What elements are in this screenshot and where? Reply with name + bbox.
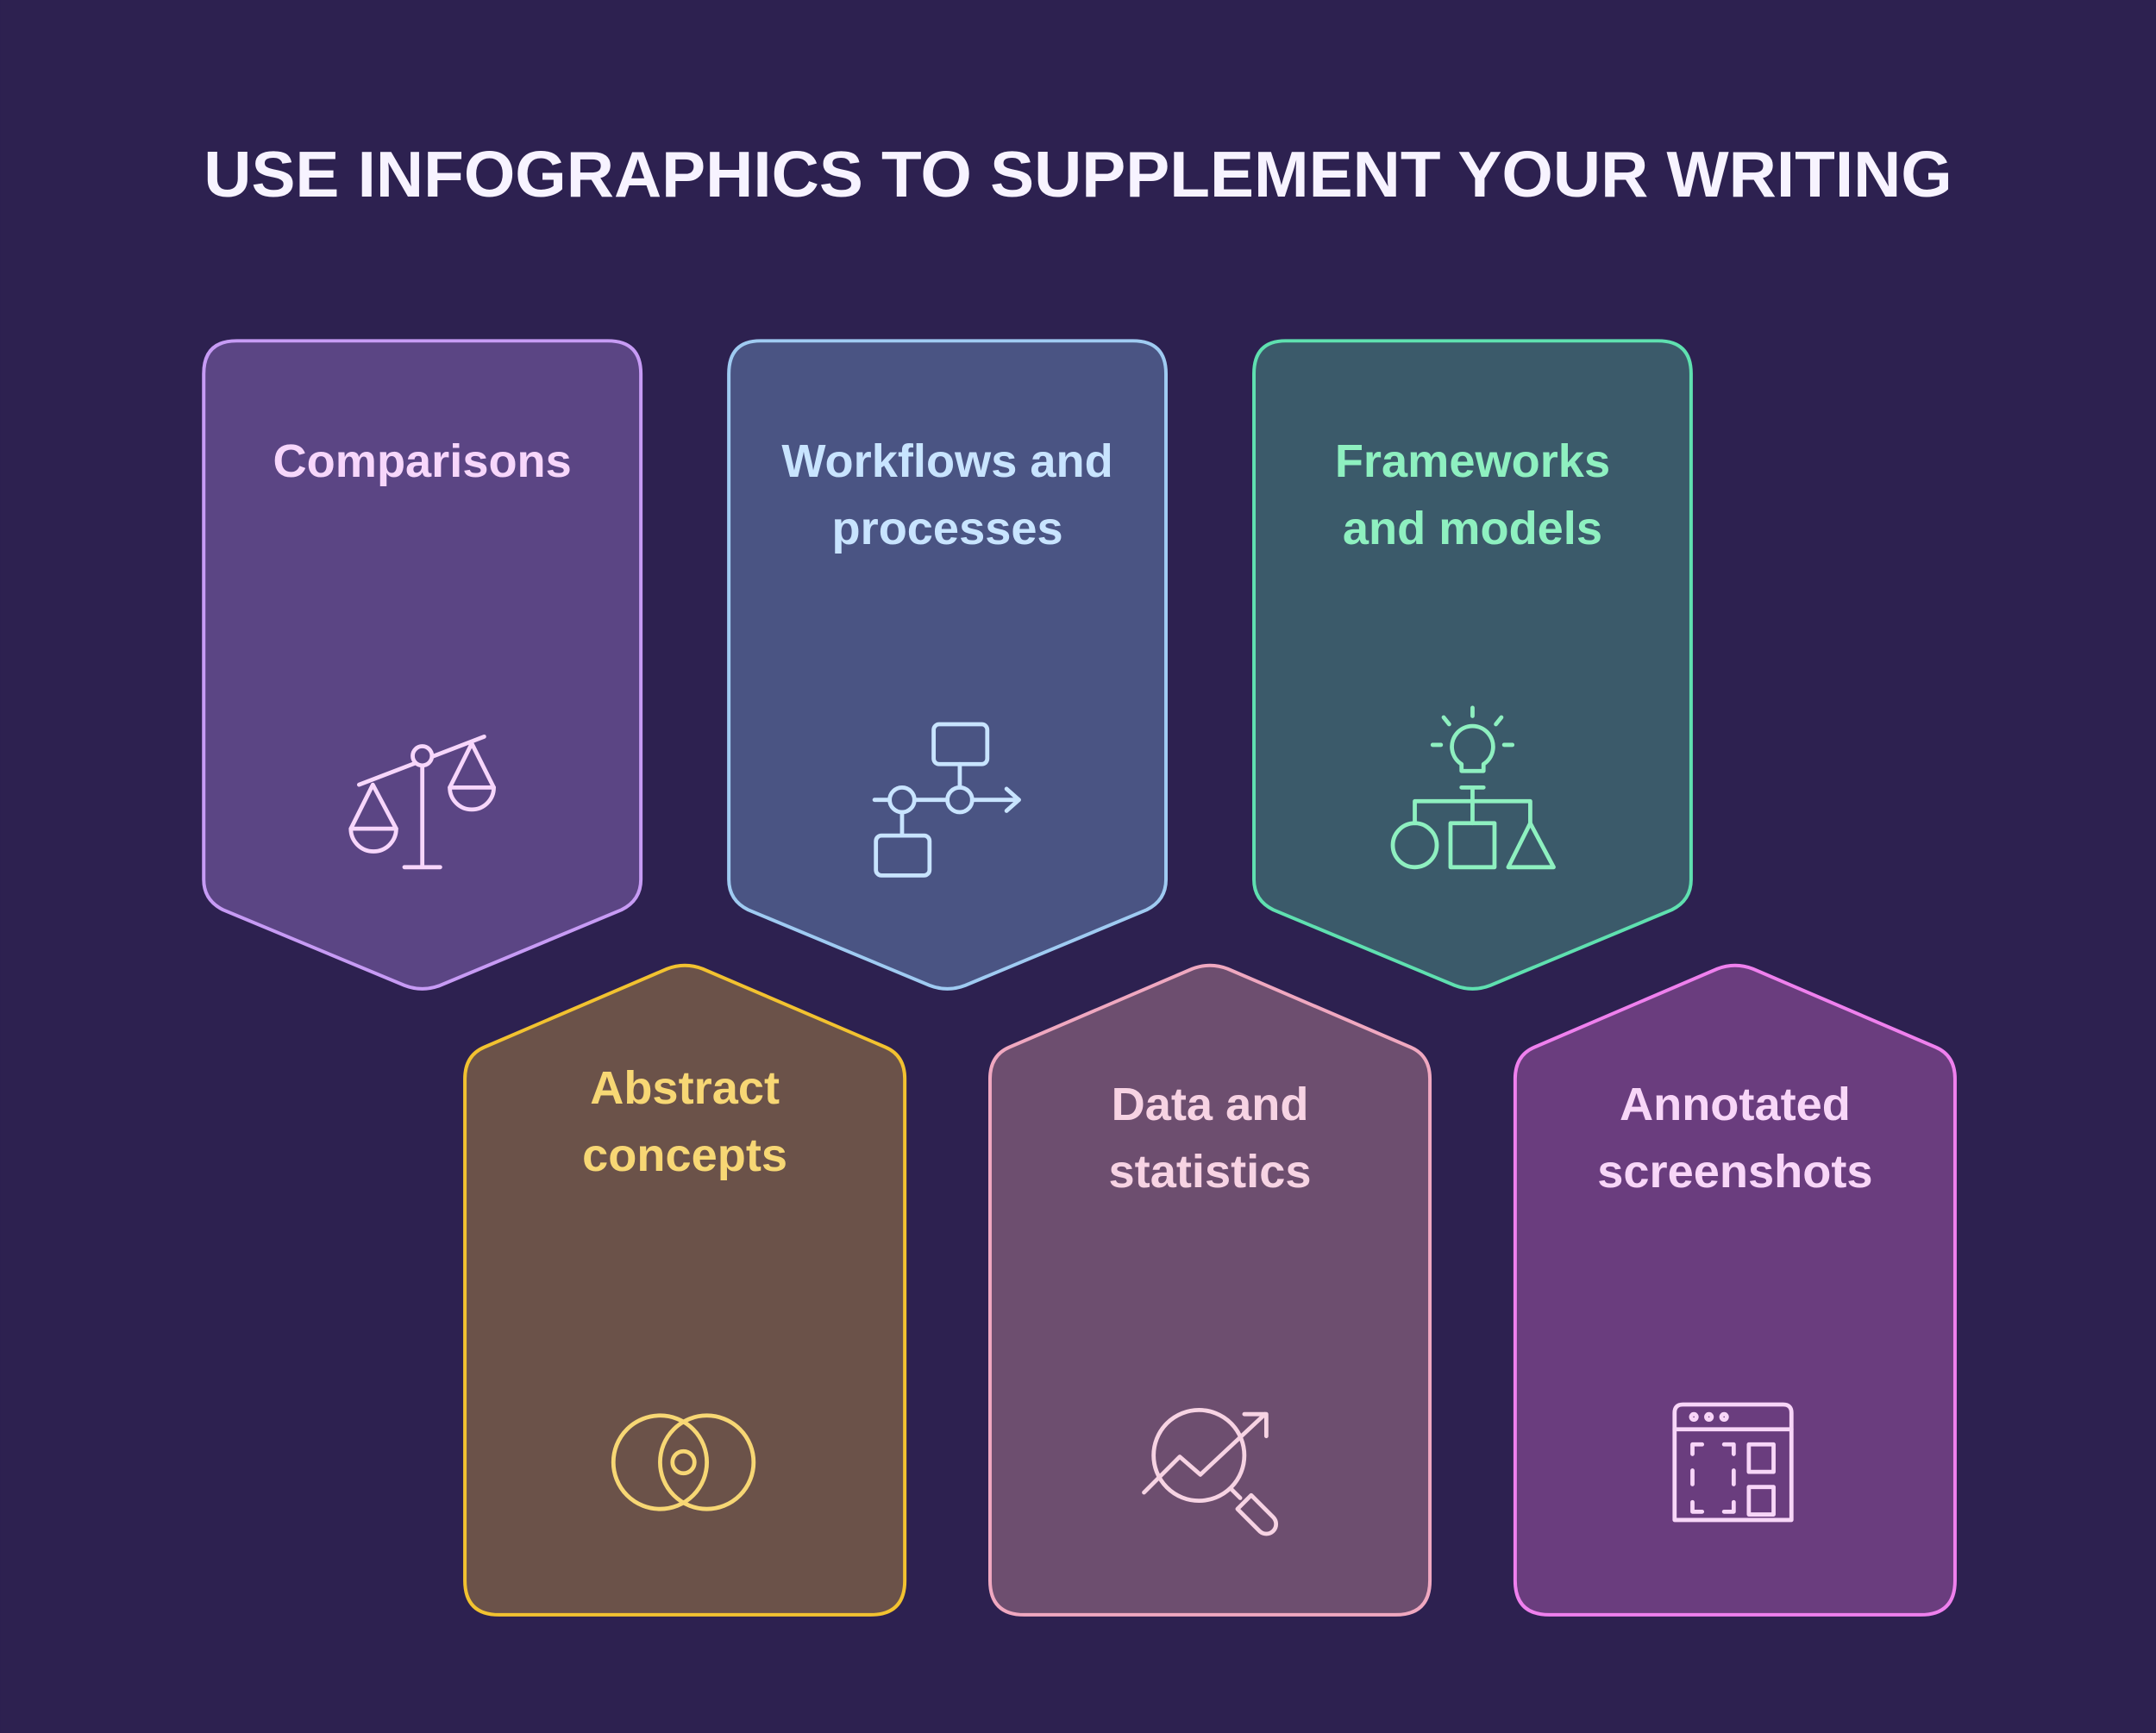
panel: abstract concepts — [465, 966, 905, 1615]
icon: screenshot — [1675, 1405, 1791, 1520]
panel: comparisons — [204, 341, 641, 989]
title: USE INFOGRAPHICS TO SUPPLEMENT YOUR WRITING — [204, 138, 1952, 210]
icon: workflow — [874, 724, 1018, 875]
heading: comparisons: Comparisons — [273, 435, 572, 487]
panel: workflows: processes — [832, 503, 1063, 554]
icon: venn — [613, 1416, 754, 1509]
panel: annotated screenshots — [1515, 966, 1955, 1615]
heading: data: Data and — [1112, 1079, 1308, 1130]
panel: workflows — [729, 341, 1166, 989]
icon: scales — [351, 736, 494, 867]
icon: data — [1144, 1410, 1276, 1534]
panel: data and statistics: statistics — [1109, 1146, 1311, 1198]
panel: frameworks — [1254, 341, 1691, 989]
heading: annotated: Annotated — [1620, 1079, 1851, 1130]
icon: frameworks — [1393, 708, 1554, 867]
panel: annotated screenshots: screenshots — [1597, 1146, 1873, 1198]
panel: abstract concepts: concepts — [582, 1129, 787, 1181]
heading: workflows: Workflows and — [781, 435, 1113, 487]
heading: abstract: Abstract — [590, 1062, 780, 1114]
heading: frameworks: Frameworks — [1335, 435, 1610, 487]
panel: frameworks: and models — [1343, 503, 1602, 554]
panel: data and statistics — [990, 966, 1430, 1615]
